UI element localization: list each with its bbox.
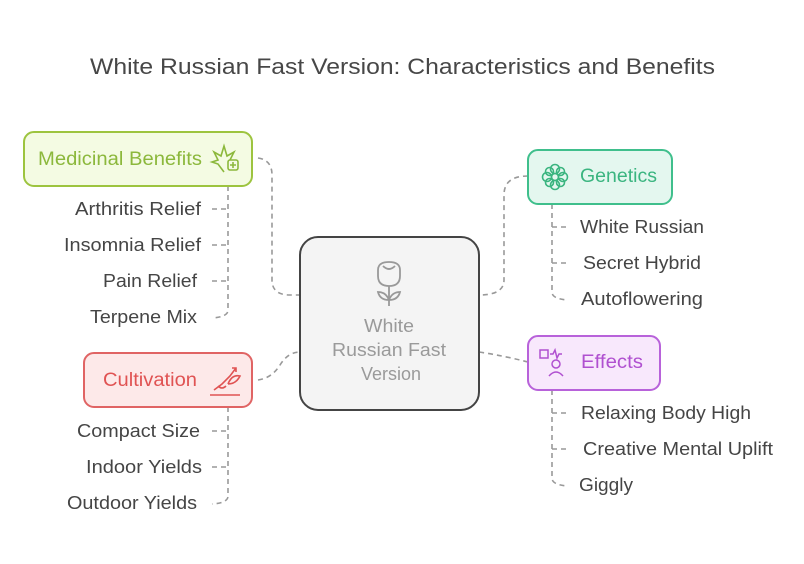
panel: effects: Relaxing Body High (581, 403, 751, 423)
panel: genetics (528, 150, 704, 309)
panel: medicinal benefits: Insomnia Relief (64, 235, 202, 255)
icon: mind (540, 350, 563, 376)
panel: medicinal benefits: Terpene Mix (90, 307, 197, 327)
connectors (212, 158, 568, 504)
icon: plant growth (210, 368, 240, 395)
panel: genetics: Genetics (580, 166, 657, 187)
panel: genetics: Secret Hybrid (583, 253, 701, 273)
icon: flower (542, 164, 568, 190)
panel: center: White (364, 316, 414, 336)
panel: center: Version (361, 364, 421, 384)
icon: leaf plus (212, 146, 238, 172)
icon: rose (378, 262, 400, 306)
panel: effects: Creative Mental Uplift (583, 439, 773, 459)
panel: effects: Giggly (579, 475, 633, 495)
panel: medicinal benefits: Arthritis Relief (75, 199, 202, 219)
panel: effects (528, 336, 773, 495)
panel: effects: Effects (581, 352, 643, 373)
panel: cultivation: Indoor Yields (86, 457, 202, 477)
panel: genetics: Autoflowering (581, 289, 703, 309)
panel: medicinal benefits: Pain Relief (103, 271, 198, 291)
panel: center: Russian Fast (332, 340, 446, 360)
panel: medicinal benefits: Medicinal Benefits (38, 149, 202, 170)
panel: cultivation: Outdoor Yields (67, 493, 197, 513)
panel: cultivation (67, 353, 252, 513)
title: White Russian Fast Version: Characteristics and Benefits (90, 54, 715, 79)
panel: medicinal benefits (24, 132, 252, 327)
panel: genetics: White Russian (580, 217, 704, 237)
panel: cultivation: Compact Size (77, 421, 200, 441)
panel: center (300, 237, 479, 410)
panel: cultivation: Cultivation (103, 370, 197, 391)
